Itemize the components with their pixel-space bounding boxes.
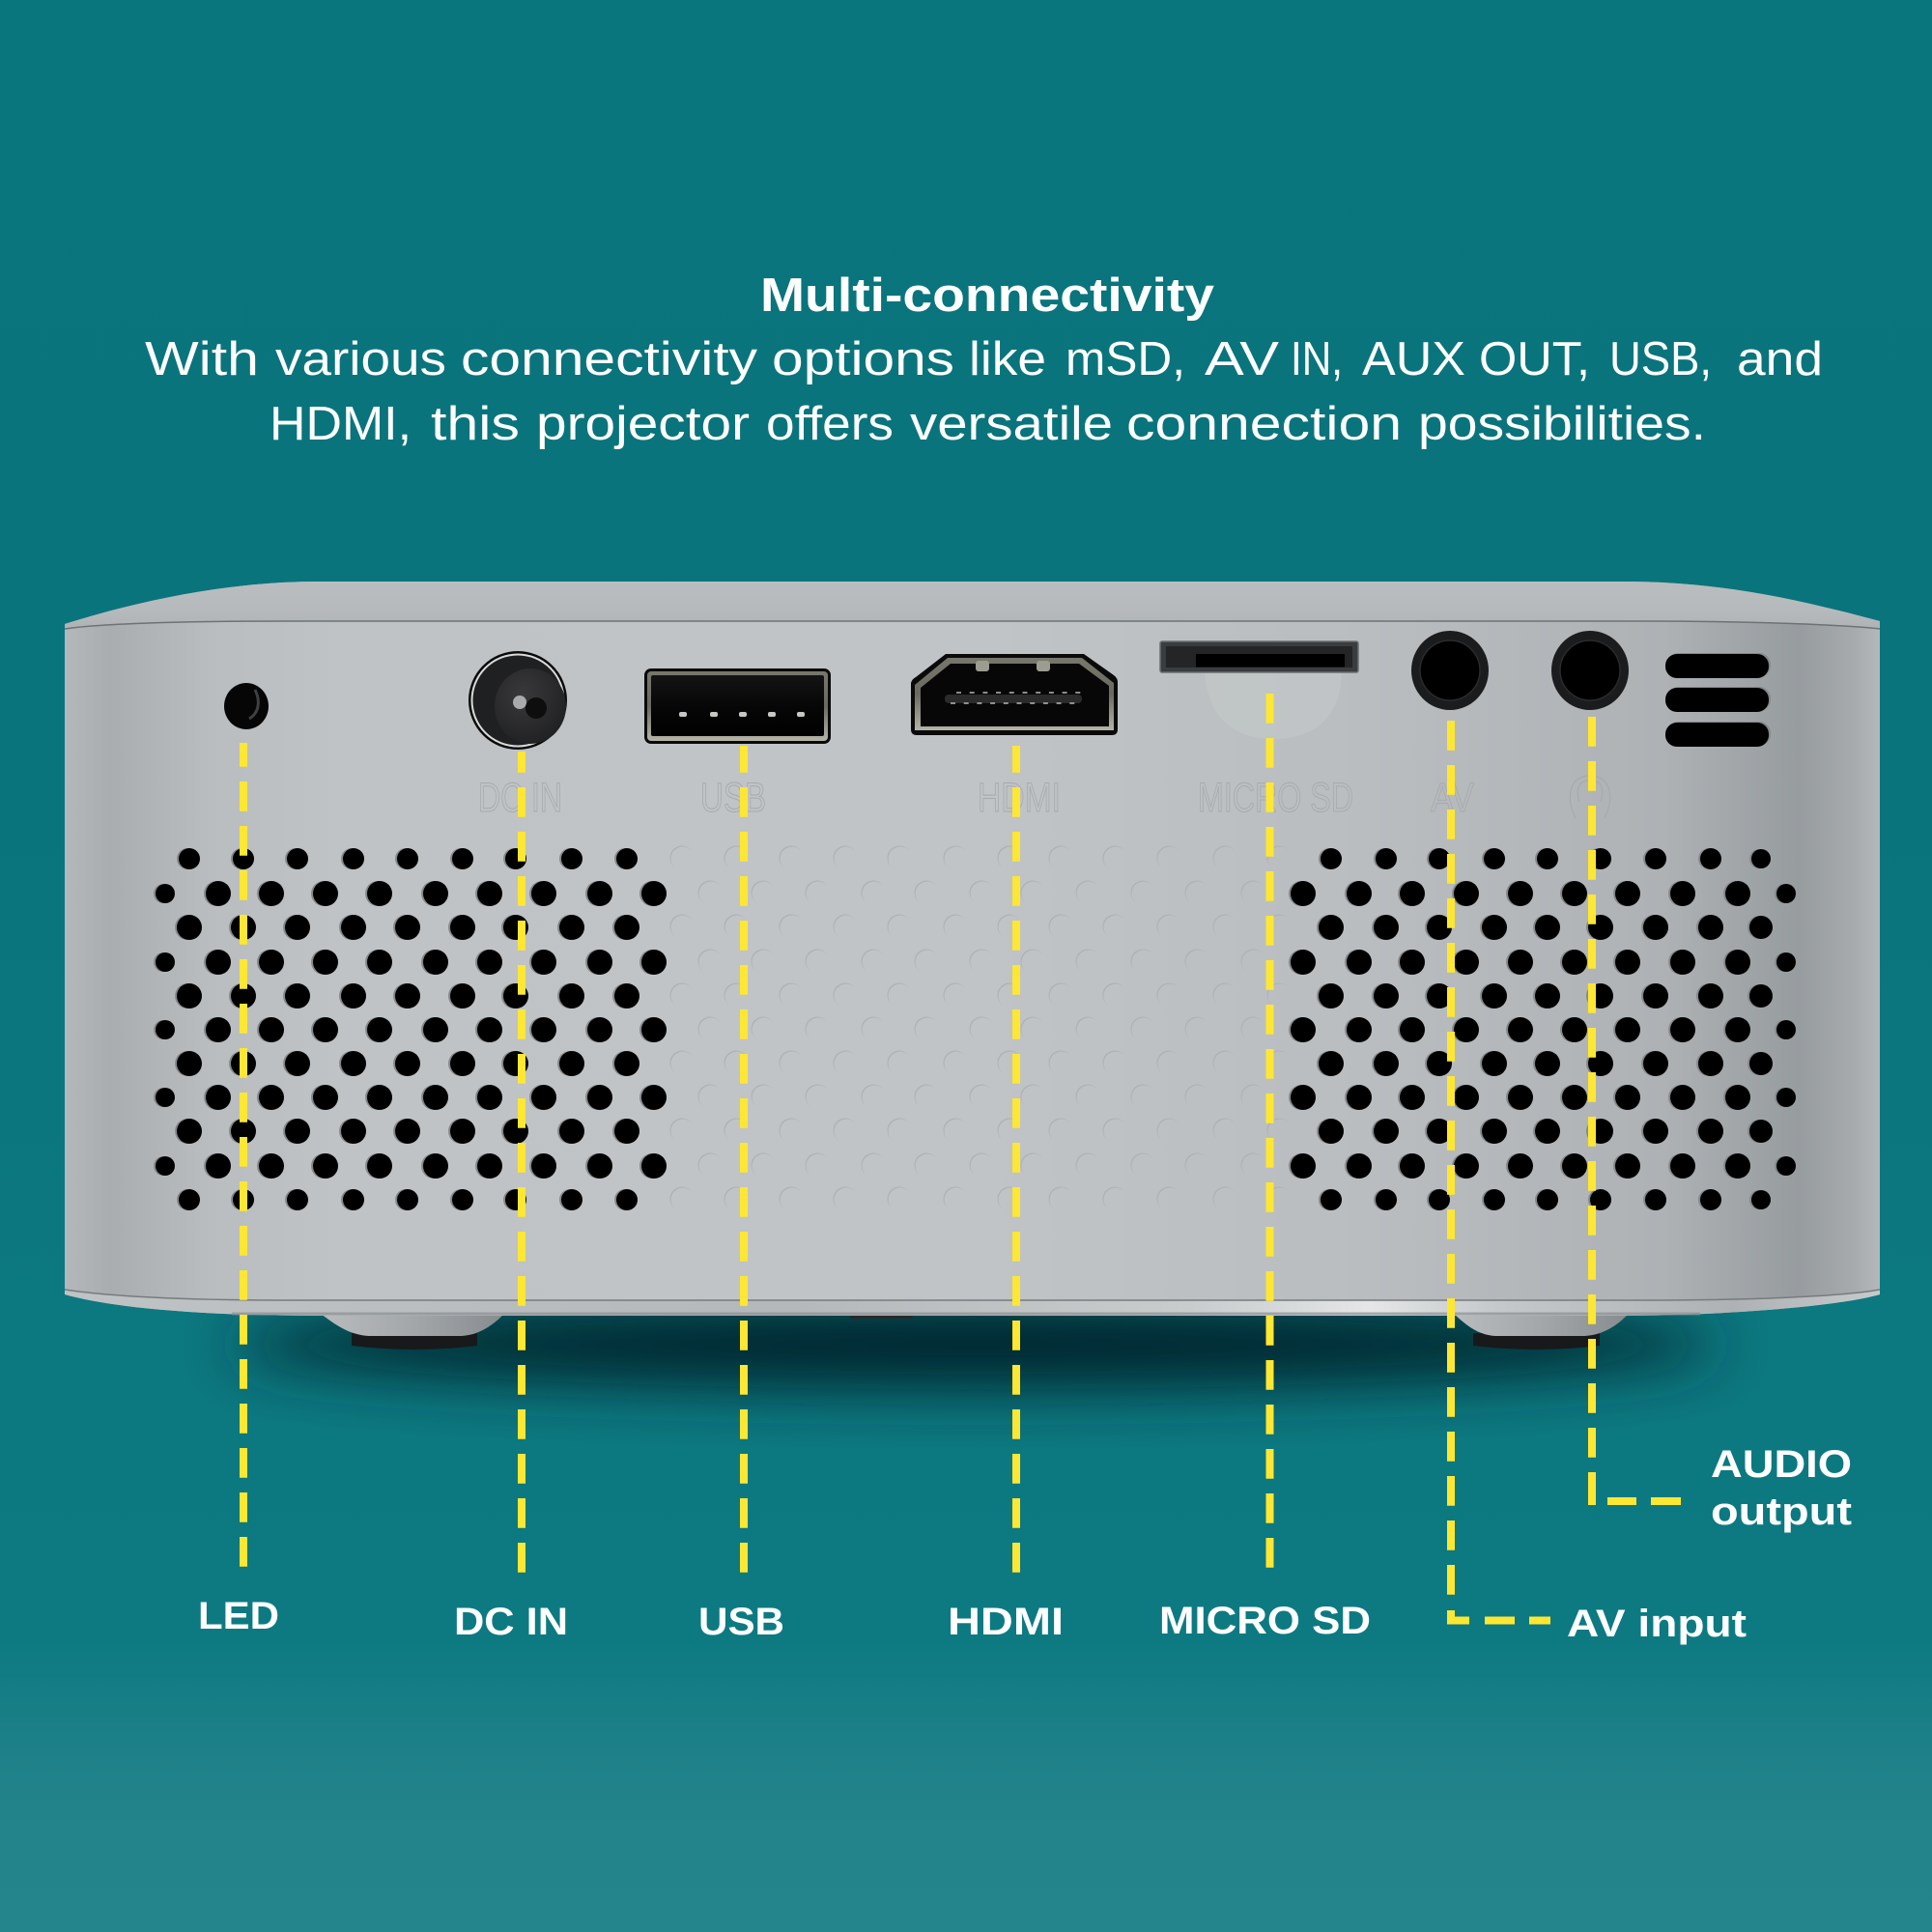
description line 1: connectivity	[461, 333, 758, 385]
description line 1	[145, 333, 1823, 385]
description line 1: With	[145, 333, 259, 385]
description line 1: mSD,	[1065, 333, 1185, 385]
bottom lip	[65, 1290, 1880, 1316]
embossed port names	[478, 775, 1610, 821]
description line 2: offers	[766, 398, 894, 450]
description line 1: and	[1737, 333, 1823, 385]
port: USB	[644, 668, 831, 744]
description line 1: options	[772, 333, 954, 385]
description line 1: IN,	[1291, 333, 1343, 385]
embossed USB: USB	[700, 775, 766, 821]
projector	[65, 582, 1880, 1350]
label: USB: USB	[698, 1601, 784, 1643]
projector shadow	[232, 1300, 1719, 1389]
port: HDMI	[911, 654, 1118, 735]
label: audio output: AUDIO	[1711, 1443, 1852, 1486]
port: DC IN	[469, 651, 567, 750]
line: HDMI	[1012, 746, 1020, 1573]
embossed DC IN: DC IN	[478, 775, 562, 821]
label: audio output: output	[1711, 1491, 1852, 1533]
description line 2: versatile	[910, 398, 1113, 450]
embossed MICRO SD: MICRO SD	[1198, 775, 1353, 821]
description line 1: OUT,	[1479, 333, 1590, 385]
line: micro SD	[1265, 694, 1273, 1568]
description line 1: like	[969, 333, 1046, 385]
line: audio output	[1592, 717, 1681, 1505]
description line 2: projector	[536, 398, 750, 450]
description line 2: this	[431, 398, 520, 450]
right foot	[1454, 1314, 1629, 1350]
callout labels	[198, 1443, 1852, 1645]
decorative blank dimples	[670, 846, 1293, 1211]
label: micro SD: MICRO SD	[1159, 1600, 1371, 1642]
description line 1: AUX	[1362, 333, 1465, 385]
embossed HDMI: HDMI	[978, 775, 1061, 821]
speaker grille holes	[154, 848, 1796, 1210]
line: DC IN	[518, 752, 526, 1573]
port: LED	[224, 683, 269, 729]
callout lines	[243, 694, 1681, 1621]
description line 2	[270, 398, 1706, 450]
left foot	[321, 1314, 504, 1350]
port: AV jack	[1411, 631, 1489, 710]
centre bottom notch	[850, 1312, 913, 1319]
embossed headphone icon	[1570, 776, 1610, 818]
line: USB	[740, 746, 748, 1573]
label: HDMI: HDMI	[948, 1601, 1064, 1643]
description line 1: various	[275, 333, 446, 385]
micro sd finger recess	[1205, 672, 1342, 739]
port: micro SD	[1160, 641, 1358, 672]
label: DC IN: DC IN	[454, 1601, 568, 1643]
description line 1: AV	[1205, 333, 1279, 385]
description line 2: possibilities.	[1418, 398, 1706, 450]
projector body	[65, 582, 1880, 1316]
line: AV input	[1451, 721, 1550, 1621]
air vents	[1665, 653, 1771, 747]
title: Multi-connectivity	[760, 270, 1214, 322]
top bevel	[65, 582, 1880, 629]
line: LED	[240, 743, 247, 1568]
embossed AV: AV	[1431, 775, 1474, 821]
heading block	[145, 270, 1823, 450]
port: headphone jack	[1551, 631, 1629, 710]
label: LED: LED	[198, 1595, 279, 1637]
label: AV input: AV input	[1567, 1603, 1747, 1645]
description line 2: connection	[1126, 398, 1402, 450]
description line 2: HDMI,	[270, 398, 412, 450]
label: audio output	[1711, 1443, 1852, 1533]
description line 1: USB,	[1609, 333, 1712, 385]
